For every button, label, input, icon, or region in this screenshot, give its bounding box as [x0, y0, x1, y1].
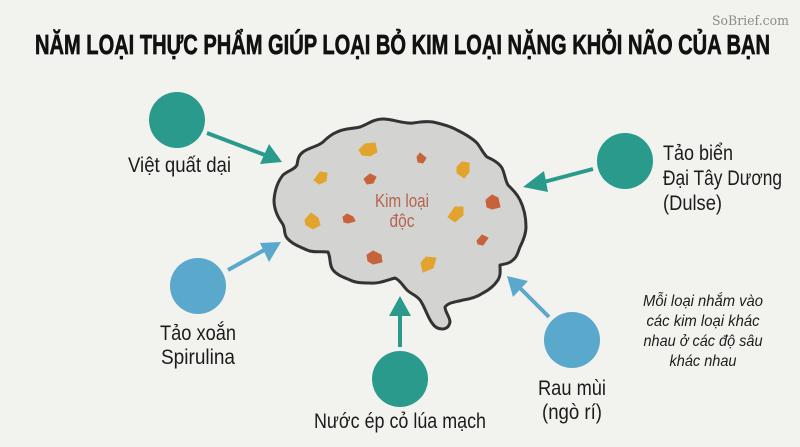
note: Mỗi loại nhắm vào: [643, 291, 763, 310]
arrow: wheatgrass to brain: [389, 296, 411, 347]
icon: teal circle: [149, 92, 205, 148]
label: [538, 377, 606, 424]
watermark: SoBrief.com: [712, 14, 789, 29]
food: cilantro: [538, 312, 606, 424]
icon: blue circle: [544, 312, 600, 368]
label: [663, 142, 782, 215]
brain label: Kim loại: [375, 191, 429, 211]
icon: teal circle: [372, 351, 428, 407]
label: Nước ép cỏ lúa mạch: [314, 410, 486, 433]
food: wheatgrass juice: [314, 351, 486, 433]
note: nhau ở các độ sâu: [644, 333, 763, 350]
brain label: độc: [390, 211, 414, 231]
label: (ngò rí): [542, 401, 602, 424]
arrow: cilantro to brain: [507, 276, 549, 317]
arrow: blueberry to brain: [207, 133, 282, 164]
icon: blue circle: [170, 258, 226, 314]
brain outline: [274, 119, 526, 329]
arrow: spirulina to brain: [228, 242, 281, 270]
arrow: dulse to brain: [523, 169, 593, 192]
label: (Dulse): [663, 192, 722, 215]
label: Tảo biển: [663, 142, 733, 165]
food: dulse: [597, 133, 782, 215]
note: khác nhau: [670, 353, 737, 370]
food: blueberry: [128, 92, 231, 177]
food: spirulina: [160, 258, 236, 369]
note: [643, 291, 763, 370]
label: Spirulina: [161, 346, 235, 369]
brain: [274, 119, 526, 329]
toxic metal particles: [305, 143, 500, 272]
icon: teal circle: [597, 133, 653, 189]
label: [160, 322, 236, 369]
label: Rau mùi: [538, 377, 606, 400]
brain label: [375, 191, 429, 231]
label: Việt quất dại: [128, 154, 231, 177]
label: Tảo xoắn: [160, 322, 236, 345]
note: các kim loại khác: [646, 313, 760, 330]
